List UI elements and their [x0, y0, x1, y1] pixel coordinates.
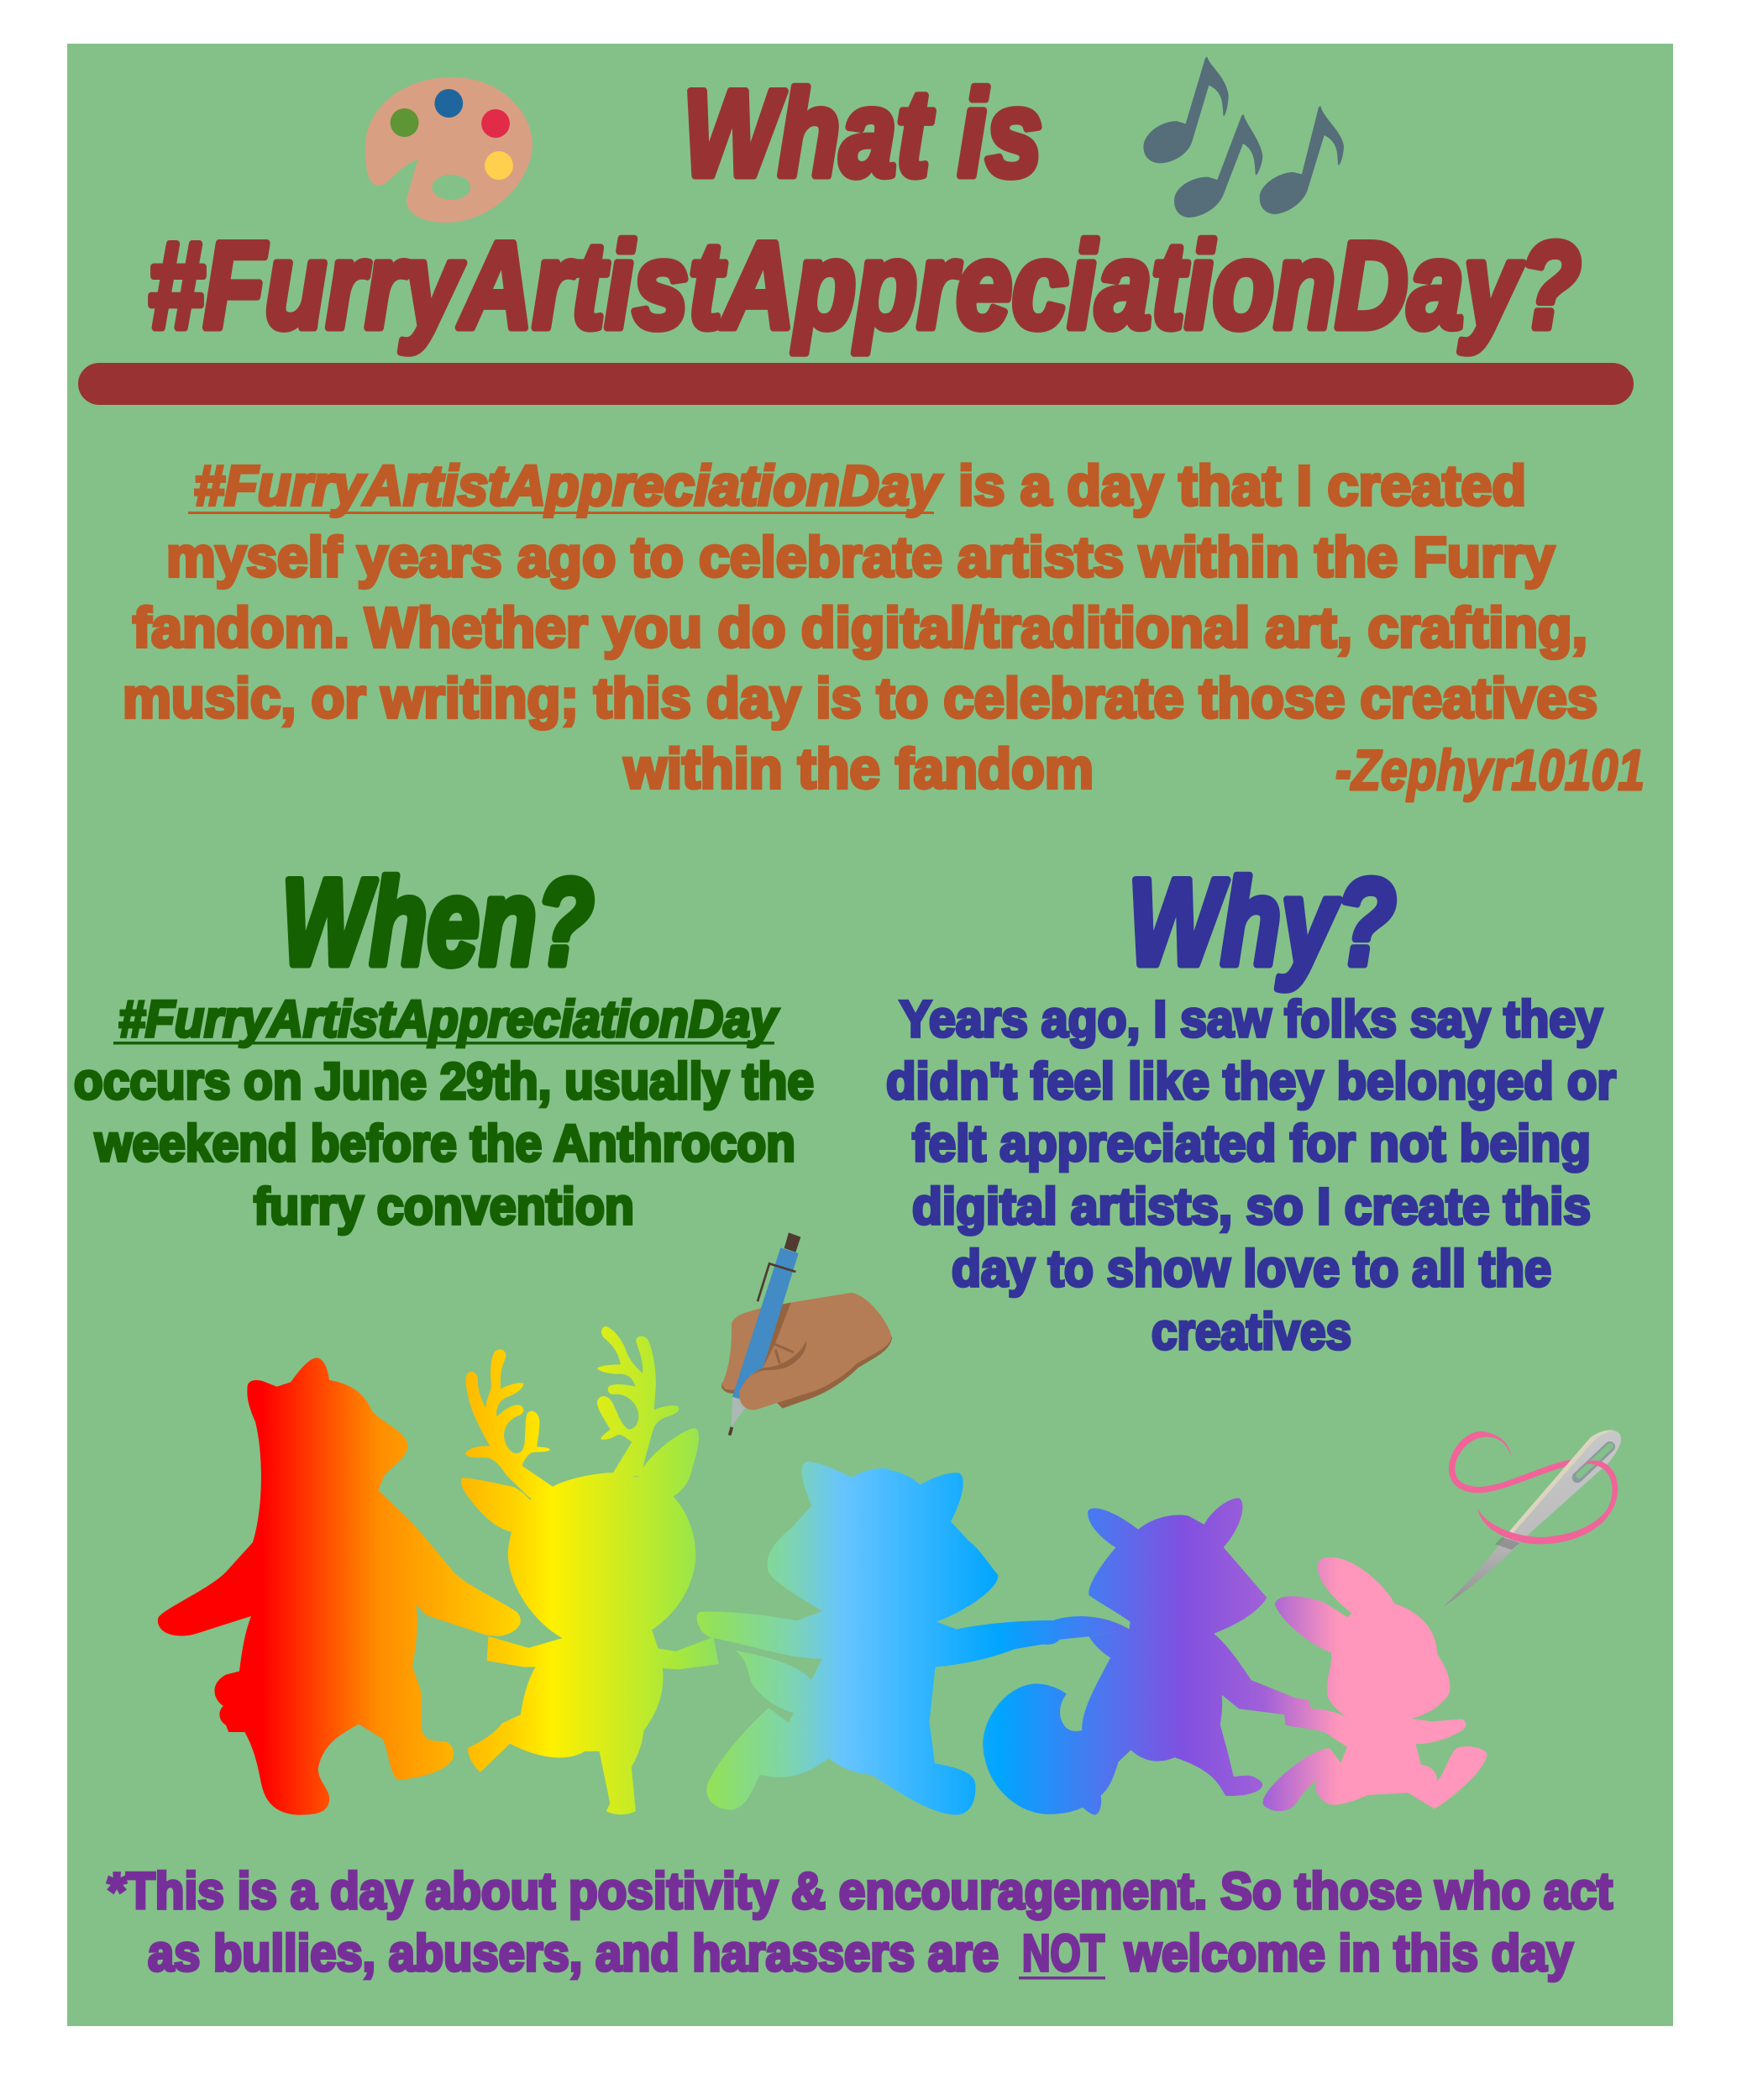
intro paragraph: within the fandom	[623, 738, 1094, 801]
silhouette: bear	[158, 1357, 521, 1815]
heading: Why: Why?	[1128, 853, 1396, 990]
footer note	[108, 1862, 1613, 1982]
intro paragraph: myself years ago to celebrate artists within the Furry	[166, 526, 1555, 589]
silhouette: fox, left half	[697, 1462, 888, 1810]
silhouette: raccoon with tail	[983, 1498, 1349, 1815]
title line one: What is	[683, 65, 1042, 202]
author signature: -Zephyr10101	[1335, 738, 1645, 802]
when text block: #FurryArtistAppreciationDay	[118, 990, 779, 1047]
why text block: Years ago, I saw folks say they	[900, 990, 1603, 1047]
when text block: weekend before the Anthrocon	[94, 1115, 795, 1172]
silhouette: fox, right half	[872, 1469, 1129, 1815]
why text block: creatives	[1152, 1303, 1351, 1360]
footer note: welcome in this day	[1124, 1924, 1573, 1982]
title divider bar	[78, 363, 1634, 405]
icon: hand writing with pen	[721, 1232, 892, 1436]
silhouette: rabbit	[1263, 1557, 1487, 1811]
why text block: didn't feel like they belonged or	[886, 1053, 1616, 1110]
icon: music notes	[1143, 57, 1344, 218]
silhouette: deer	[461, 1326, 719, 1814]
footer note: *This is a day about positivity & encouragement. So those who act	[108, 1862, 1613, 1919]
icon: paint palette	[365, 77, 532, 223]
icon: needle and thread	[1443, 1430, 1621, 1607]
why text block: digital artists, so I create this	[912, 1178, 1591, 1235]
footer note: NOT	[1022, 1924, 1104, 1982]
why text block: felt appreciated for not being	[912, 1115, 1591, 1172]
when text block	[74, 990, 814, 1235]
why text block: day to show love to all the	[952, 1240, 1551, 1297]
footer note: as bullies, abusers, and harassers are	[148, 1924, 999, 1982]
why text block	[886, 990, 1616, 1360]
intro paragraph: fandom. Whether you do digital/traditional art, crafting,	[133, 596, 1587, 659]
when text block: furry convention	[254, 1178, 634, 1235]
intro paragraph: #FurryArtistAppreciationDay	[194, 454, 943, 517]
intro paragraph: music, or writing; this day is to celebrate those creatives	[123, 667, 1597, 730]
intro paragraph: is a day that I created	[958, 454, 1526, 517]
heading: When: When?	[281, 853, 594, 990]
when text block: occurs on June 29th, usually the	[74, 1053, 814, 1110]
intro paragraph	[123, 454, 1597, 801]
